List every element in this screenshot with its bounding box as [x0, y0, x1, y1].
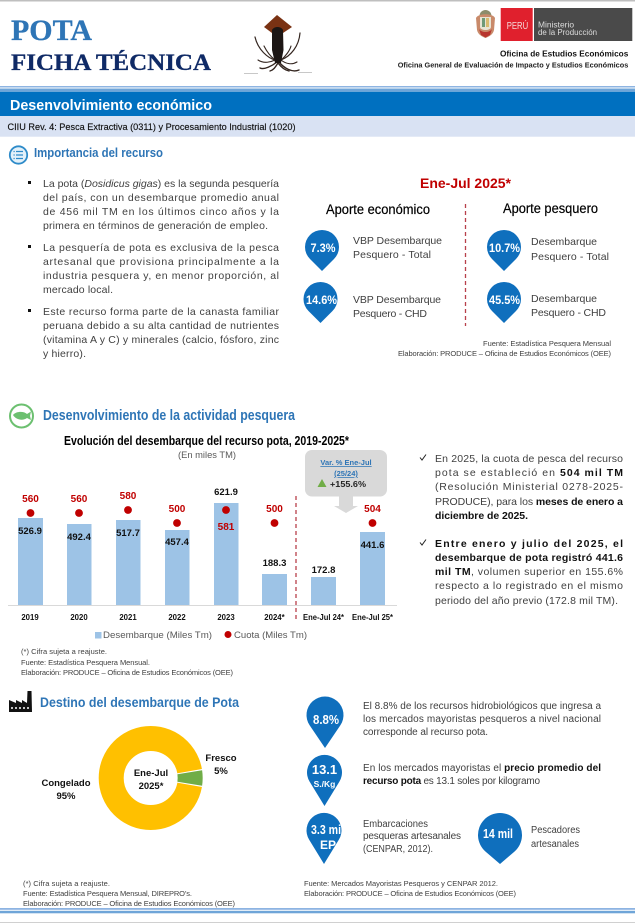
source note — [398, 339, 612, 358]
heading: Destino del desembarque de Pota — [40, 694, 239, 710]
chart notes — [21, 647, 234, 677]
bar chart: 621.9 — [214, 487, 238, 498]
donut notes: Elaboración: PRODUCE – Oficina de Estudios Económicos (OEE) — [23, 899, 236, 908]
chart notes: (*) Cifra sujeta a reajuste. — [21, 647, 107, 656]
text block: quota and landings — [420, 453, 624, 607]
text: price: En los mercados mayoristas el precio promedio del — [363, 763, 601, 774]
donut chart: Ene-Jul — [134, 768, 168, 779]
heading: Desenvolvimiento de la actividad pesquera — [43, 408, 296, 424]
text block: bullets: artesanal que provisiona principalmente a la — [43, 256, 279, 268]
label: vbp chd: Pesquero - CHD — [353, 308, 427, 320]
text block: bullets: La pota (Dosidicus gigas) es la segunda pesquería — [43, 178, 279, 190]
text block: quota and landings: pota se estableció en 504 mil TM — [435, 467, 623, 479]
bar chart: 441.6 — [361, 540, 384, 551]
bar chart: 2022 — [168, 613, 186, 622]
source note: Elaboración: PRODUCE – Oficina de Estudios Económicos (OEE) — [398, 349, 612, 358]
label: vbp chd — [353, 294, 441, 320]
bar chart: 188.3 — [263, 558, 286, 569]
text block: quota and landings: PRODUCE), para los meses de enero a — [435, 496, 623, 508]
donut notes: (*) Cifra sujeta a reajuste. — [23, 879, 110, 888]
donut chart: Fresco — [205, 753, 237, 764]
text block: bullets: mercado local. — [43, 284, 113, 296]
bar chart: 500 — [169, 504, 186, 515]
pin: 7.3%: 7.3% — [310, 241, 336, 255]
header — [11, 8, 632, 75]
icon: list — [10, 146, 27, 164]
bar chart — [8, 487, 397, 622]
market notes: Elaboración: PRODUCE – Oficina de Estudios Económicos (OEE) — [304, 889, 516, 898]
text block: bullets — [28, 178, 280, 360]
heading: Ene-Jul 2025* — [420, 175, 512, 191]
text: fishers: artesanales — [531, 839, 579, 850]
title: ficha técnica: FICHA TÉCNICA — [11, 50, 211, 75]
text block: quota and landings: (Resolución Ministerial 0278-2025- — [435, 481, 624, 493]
label: vbp total: VBP Desembarque — [353, 235, 442, 247]
chart unit: (En miles TM) — [178, 450, 236, 460]
text: share: El 8.8% de los recursos hidrobiológicos que ingresa a — [363, 701, 601, 712]
text: vessels: Embarcaciones — [363, 819, 428, 830]
pin: 3.3 mil ep — [306, 813, 344, 864]
text block: bullets: (vitamina A y C) y minerales (calcio, fósforo, zinc — [43, 334, 279, 346]
bar chart: 504 — [364, 504, 381, 515]
text block: bullets: de 456 mil TM en los últimos cinco años y la — [43, 206, 279, 218]
heading: Importancia del recurso — [34, 146, 163, 160]
panel: mercado y flota — [304, 697, 601, 898]
bar chart: 2023 — [217, 613, 235, 622]
bar chart: 500 — [266, 504, 283, 515]
section band — [0, 92, 635, 116]
bar chart: 2024* — [264, 613, 286, 622]
text: price: recurso pota es 13.1 soles por kilogramo — [363, 776, 540, 787]
callout: variation: +155.6% — [330, 479, 366, 489]
bar chart: Ene-Jul 24* — [303, 613, 345, 622]
callout: variation: Var. % Ene-Jul — [320, 458, 372, 467]
text: vessels: pesqueras artesanales — [363, 831, 461, 842]
pin: 8.8%: 8.8% — [313, 713, 339, 727]
legend — [95, 630, 307, 641]
office name: Oficina de Estudios Económicos — [500, 49, 629, 59]
panel: importancia del recurso — [10, 146, 280, 360]
classification strip: CIIU Rev. 4: Pesca Extractiva (0311) y Procesamiento Industrial (1020) — [8, 122, 296, 133]
text block: bullets: peruana debido a su alta cantidad de nutrientes — [43, 320, 279, 332]
icon: factory — [9, 691, 32, 712]
icon: fish — [10, 404, 33, 428]
market notes — [304, 879, 516, 898]
bar chart: 2020 — [70, 613, 88, 622]
panel: aportes ene-jul 2025 — [304, 175, 612, 358]
bar chart: 2021 — [119, 613, 137, 622]
label: desembarque chd: Pesquero - CHD — [531, 307, 606, 319]
text block: quota and landings: Entre enero y julio del 2025, el — [435, 538, 623, 550]
bar chart: 526.9 — [18, 526, 42, 537]
chart notes: Elaboración: PRODUCE – Oficina de Estudios Económicos (OEE) — [21, 668, 234, 677]
text block: bullets: Este recurso forma parte de la canasta familiar — [43, 306, 280, 318]
pin: 8.8% — [306, 697, 344, 748]
callout: variation: (25/24) — [334, 469, 358, 478]
pin: 14.6%: 14.6% — [306, 293, 337, 307]
donut chart — [41, 738, 237, 818]
donut chart: 5% — [214, 766, 228, 777]
title: POTA: POTA — [11, 15, 93, 47]
text: vessels — [363, 819, 461, 855]
pin: 14 mil — [478, 813, 522, 864]
sub-heading: aporte económico: Aporte económico — [326, 202, 430, 217]
band title: Desenvolvimiento económico — [10, 97, 212, 114]
bar chart: 560 — [22, 494, 39, 505]
text: fishers: Pescadores — [531, 825, 580, 836]
donut chart: 95% — [56, 791, 76, 802]
panel: destino del desembarque — [9, 691, 239, 908]
donut notes: Fuente: Estadística Pesquera Mensual, DIREPRO’s. — [23, 889, 192, 898]
bar chart: 580 — [120, 491, 137, 502]
pin: 45.5%: 45.5% — [489, 293, 520, 307]
text: share — [363, 701, 601, 738]
bar chart: 517.7 — [116, 528, 140, 539]
pin: 10.7% — [487, 230, 521, 271]
bar chart: 2019 — [21, 613, 39, 622]
market notes: Fuente: Mercados Mayoristas Pesqueros y CENPAR 2012. — [304, 879, 498, 888]
bar chart: Ene-Jul 25* — [352, 613, 394, 622]
department name: Oficina General de Evaluación de Impacto y Estudios Económicos — [398, 61, 628, 70]
chart title: Evolución del desembarque del recurso pota, 2019-2025* — [64, 433, 350, 448]
text block: bullets: primera en términos de generación de empleo. — [43, 220, 268, 232]
pin: 3.3 mil ep: EP — [320, 838, 336, 852]
donut chart: Congelado — [41, 778, 91, 789]
bar chart: 457.4 — [165, 537, 190, 548]
illustration: squid — [244, 15, 312, 74]
text block: quota and landings: periodo del año previo (172.8 mil TM). — [435, 595, 618, 607]
sub-heading: aporte pesquero: Aporte pesquero — [503, 201, 598, 216]
text: share: corresponde al recurso pota. — [363, 727, 488, 738]
text block: bullets: del país, con un desembarque promedio anual — [43, 192, 279, 204]
pin: 13.1 s/kg — [307, 755, 342, 806]
text block: bullets: y hierro). — [43, 348, 86, 360]
panel: desenvolvimiento de la actividad pesquera — [8, 404, 624, 677]
text block: quota and landings: respecto a lo registrado en el mismo — [435, 580, 623, 592]
logo: ministerio de la producción: Ministerio — [538, 20, 575, 29]
label: desembarque chd — [531, 293, 606, 319]
text: share: los mercados mayoristas pesqueros a nivel nacional — [363, 714, 601, 725]
label: desembarque chd: Desembarque — [531, 293, 597, 305]
bar chart: 560 — [71, 494, 88, 505]
bar chart: 581 — [218, 522, 235, 533]
text block: bullets: industria pesquera y, en menor proporción, al — [43, 270, 279, 282]
pin: 13.1 s/kg: 13.1 — [312, 762, 337, 777]
text block: quota and landings: diciembre de 2025. — [435, 510, 528, 522]
logo: ministerio de la producción — [476, 8, 632, 41]
pin: 14 mil: 14 mil — [483, 827, 513, 841]
label: vbp total: Pesquero - Total — [353, 249, 431, 261]
pin: 3.3 mil ep: 3.3 mil — [311, 823, 344, 837]
legend: Cuota (Miles Tm) — [234, 630, 307, 641]
text: fishers — [531, 825, 580, 850]
donut chart: 2025* — [139, 781, 164, 792]
label: desembarque total: Desembarque — [531, 236, 597, 248]
pin: 10.7%: 10.7% — [489, 241, 520, 255]
pin: 45.5% — [487, 282, 521, 323]
pin: 14.6% — [304, 282, 337, 323]
chart notes: Fuente: Estadística Pesquera Mensual. — [21, 658, 150, 667]
label: desembarque total — [531, 236, 609, 263]
text block: quota and landings: desembarque de pota registró 441.6 — [435, 552, 623, 564]
legend: Desembarque (Miles Tm) — [103, 630, 212, 641]
callout: variation — [305, 450, 387, 513]
logo: ministerio de la producción: de la Producción — [538, 28, 597, 37]
label: desembarque total: Pesquero - Total — [531, 251, 609, 263]
source note: Fuente: Estadística Pesquera Mensual — [483, 339, 611, 348]
bar chart: 172.8 — [312, 565, 335, 576]
text block: quota and landings: En 2025, la cuota de pesca del recurso — [435, 453, 623, 465]
pin: 13.1 s/kg: S./Kg — [314, 779, 335, 789]
text block: quota and landings: mil TM, volumen superior en 155.6% — [435, 566, 623, 578]
label: vbp chd: VBP Desembarque — [353, 294, 441, 306]
label: vbp total — [353, 235, 442, 261]
text: vessels: (CENPAR, 2012). — [363, 844, 433, 855]
text block: bullets: La pesquería de pota es exclusiva de la pesca — [43, 242, 279, 254]
pin: 7.3% — [305, 230, 339, 271]
donut notes — [23, 879, 236, 908]
bar chart: 492.4 — [67, 532, 92, 543]
classification strip — [0, 116, 635, 137]
logo: ministerio de la producción: PERÚ — [507, 19, 528, 32]
text: price — [363, 763, 601, 787]
